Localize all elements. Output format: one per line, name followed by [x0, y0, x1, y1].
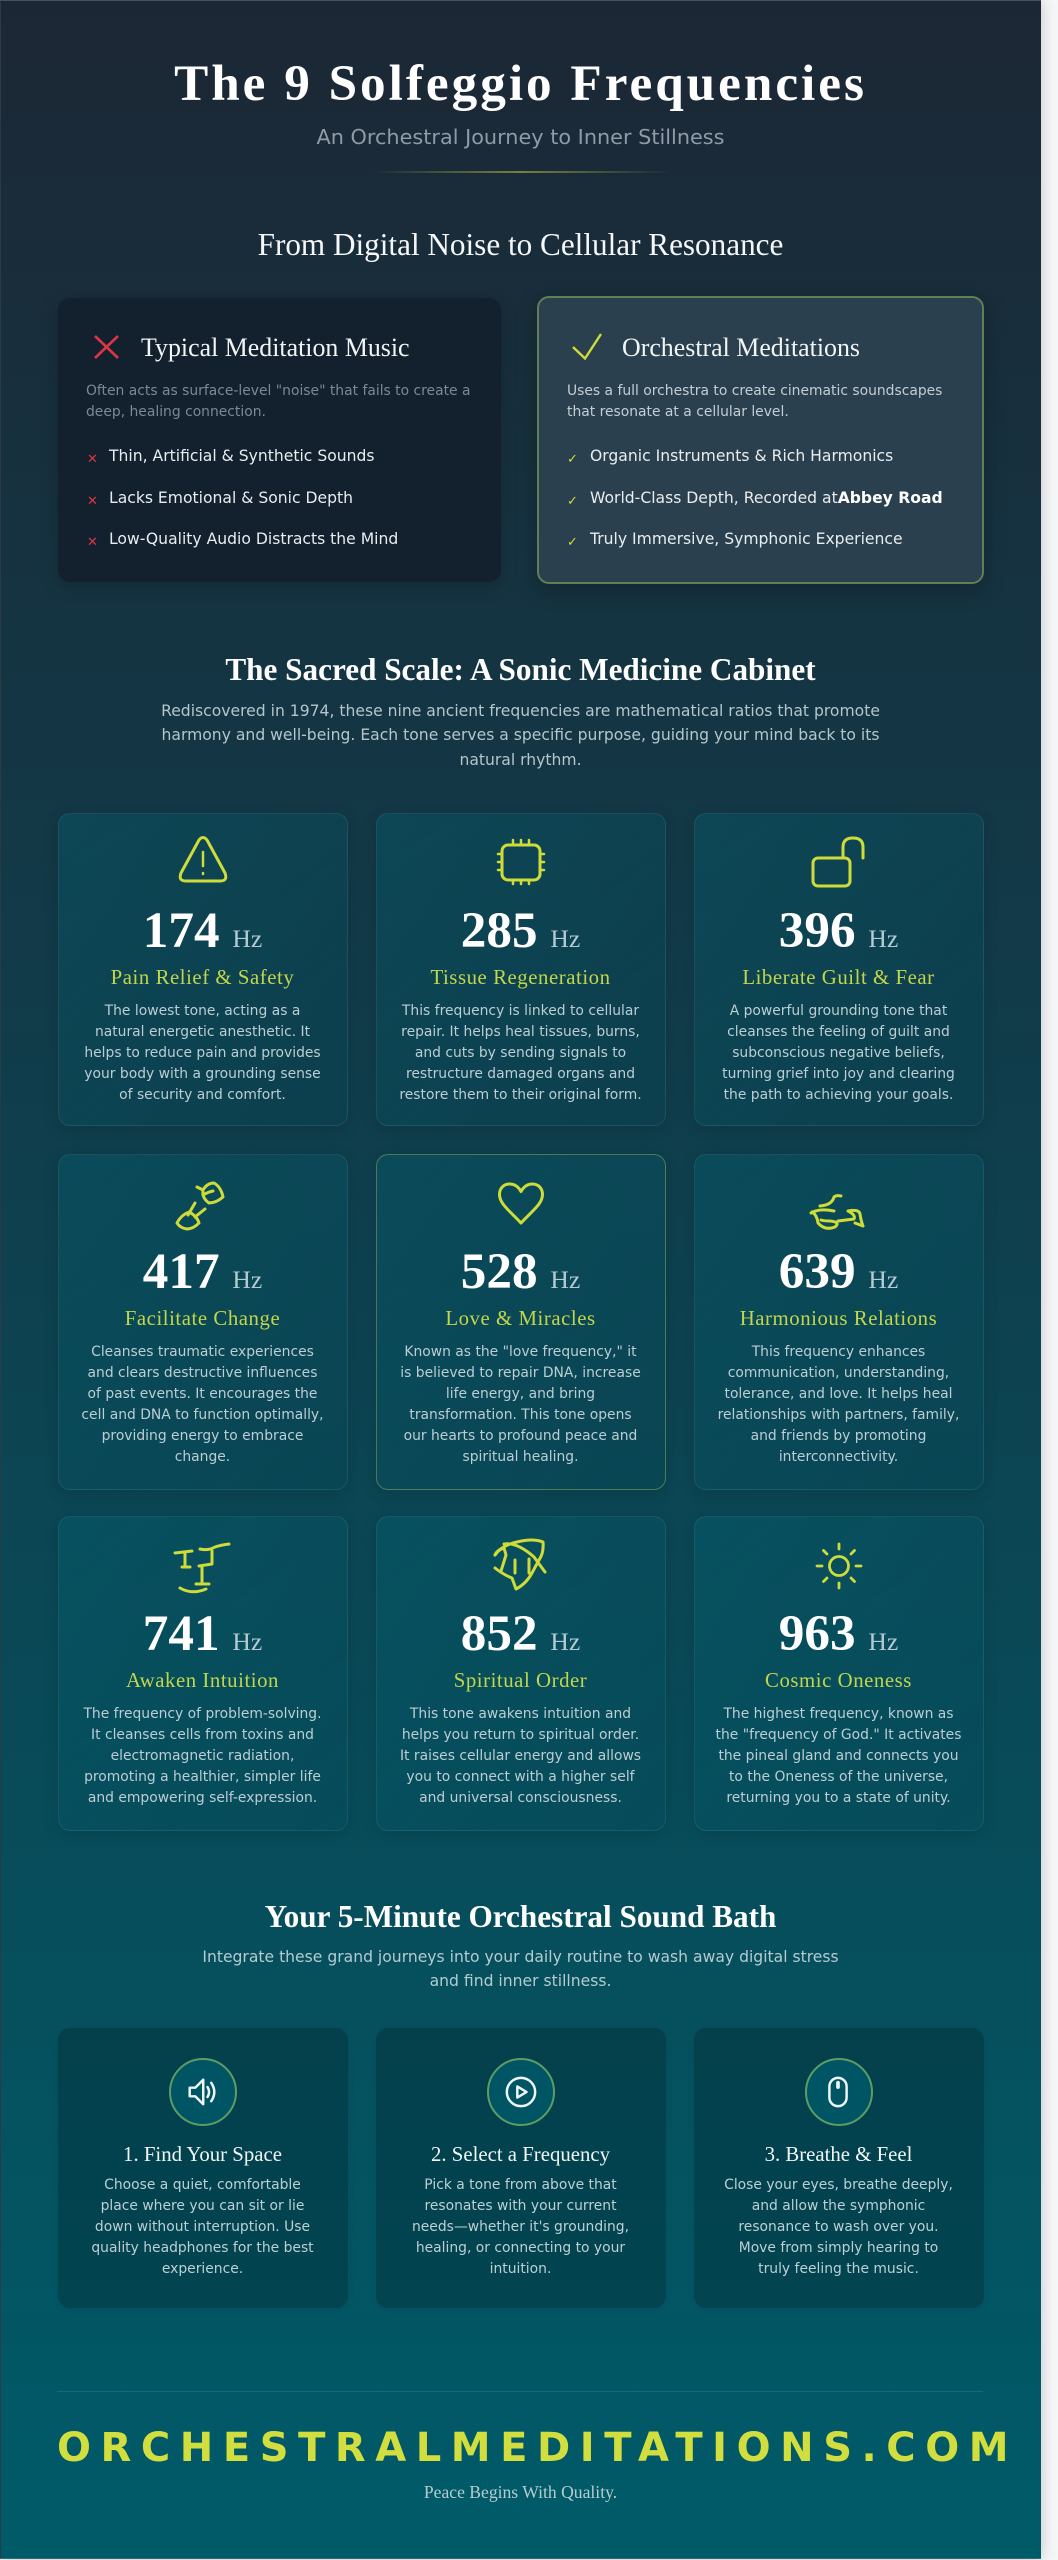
panel: step 1 — [58, 2028, 348, 2308]
frequency description — [400, 1344, 641, 1465]
frequency description: you to connect with a higher self — [406, 1769, 635, 1785]
panel: 639 Hz — [694, 1154, 984, 1490]
frequency description: is believed to repair DNA, increase — [400, 1365, 641, 1381]
step description: Choose a quiet, comfortable — [104, 2177, 301, 2193]
frequency name: Liberate Guilt & Fear — [742, 966, 935, 989]
frequency description: your body with a grounding sense — [84, 1066, 321, 1082]
frequency description: transformation. This tone opens — [409, 1407, 632, 1423]
frequency description: and clears destructive influences — [88, 1365, 317, 1381]
frequency description: the path to achieving your goals. — [724, 1087, 953, 1103]
frequency description: electromagnetic radiation, — [111, 1748, 294, 1764]
step title: 3. Breathe & Feel — [765, 2143, 912, 2166]
icon: broken chain — [176, 1182, 224, 1230]
frequency description: and universal consciousness. — [419, 1790, 622, 1806]
description — [567, 383, 942, 420]
heading: orchestral: Orchestral Meditations — [622, 333, 860, 362]
intro text: sound bath — [202, 1948, 839, 1990]
header divider — [371, 171, 671, 173]
frequency value: 285 Hz — [461, 902, 580, 959]
footer logo: ORCHESTRALMEDITATIONS.COM — [57, 2425, 1018, 2471]
frequency description: interconnectivity. — [779, 1449, 898, 1465]
icon: warning triangle — [178, 836, 228, 882]
frequency description: of security and comfort. — [119, 1087, 286, 1103]
list item: Truly Immersive, Symphonic Experience — [590, 530, 903, 548]
frequency description: It cleanses cells from toxins and — [91, 1727, 314, 1743]
frequency description: The frequency of problem-solving. — [83, 1706, 322, 1722]
step description: down without interruption. Use — [95, 2219, 310, 2235]
frequency value: 639 Hz — [779, 1243, 898, 1300]
icon: connected figures — [809, 1194, 864, 1230]
frequency description: relationships with partners, family, — [718, 1407, 959, 1423]
icon: speaker — [168, 2058, 236, 2126]
step description: healing, or connecting to your — [416, 2240, 625, 2256]
frequency description: and cuts by sending signals to — [415, 1045, 626, 1061]
frequency value: 741 Hz — [143, 1605, 262, 1662]
panel: orchestral meditations — [537, 296, 984, 584]
step description: place where you can sit or lie — [101, 2198, 304, 2214]
icon: yellow check — [572, 334, 602, 360]
frequency value: 852 Hz — [461, 1605, 580, 1662]
step description: and allow the symphonic — [752, 2198, 925, 2214]
frequency description — [718, 1344, 959, 1465]
panel: typical meditation music — [58, 298, 501, 582]
frequency description: This frequency is linked to cellular — [402, 1003, 639, 1019]
list item: Thin, Artificial & Synthetic Sounds — [109, 447, 375, 465]
frequency description: turning grief into joy and clearing — [722, 1066, 955, 1082]
frequency description: This frequency enhances — [752, 1344, 925, 1360]
description: deep, healing connection. — [86, 404, 266, 420]
panel: 852 Hz — [376, 1516, 666, 1831]
frequency description: Known as the "love frequency," it — [404, 1344, 637, 1360]
icon: open lock — [812, 836, 864, 888]
step description: intuition. — [490, 2261, 551, 2277]
frequency description — [722, 1003, 955, 1103]
frequency description — [84, 1003, 321, 1103]
frequency description: It raises cellular energy and allows — [400, 1748, 641, 1764]
list item: Low-Quality Audio Distracts the Mind — [109, 530, 398, 548]
intro text: sacred scale: natural rhythm. — [459, 751, 582, 769]
heading: sacred scale: The Sacred Scale: A Sonic Medicine Cabinet — [225, 652, 816, 687]
frequency description: and friends by promoting — [751, 1428, 926, 1444]
icon: chip — [496, 838, 546, 886]
subtitle: An Orchestral Journey to Inner Stillness — [317, 125, 724, 149]
panel: 963 Hz — [694, 1516, 984, 1831]
list item: ✕ — [87, 494, 98, 509]
frequency description: change. — [175, 1449, 230, 1465]
description: Uses a full orchestra to create cinematic soundscapes — [567, 383, 942, 399]
list item: ✓ — [567, 535, 578, 550]
frequency description: promoting a healthier, simpler life — [84, 1769, 321, 1785]
frequency description: This tone awakens intuition and — [410, 1706, 631, 1722]
step description — [694, 2175, 984, 2280]
description: Often acts as surface-level "noise" that fails to create a — [86, 383, 470, 399]
frequency name: Love & Miracles — [445, 1307, 596, 1330]
frequency description: to the Oneness of the universe, — [729, 1769, 948, 1785]
icon: breath capsule — [804, 2058, 872, 2126]
frequency name: Spiritual Order — [454, 1669, 587, 1692]
frequency description: subconscious negative beliefs, — [732, 1045, 945, 1061]
step description: Close your eyes, breathe deeply, — [724, 2177, 953, 2193]
frequency description — [81, 1344, 324, 1465]
step description: resonance to wash over you. — [738, 2219, 939, 2235]
list item: ✕ — [87, 535, 98, 550]
frequency description: repair. It helps heal tissues, burns, — [401, 1024, 640, 1040]
step description: experience. — [162, 2261, 243, 2277]
heading: sound bath: Your 5-Minute Orchestral Sound Bath — [265, 1899, 776, 1934]
title: The 9 Solfeggio Frequencies — [174, 55, 867, 112]
frequency description: natural energetic anesthetic. It — [95, 1024, 310, 1040]
frequency value: 417 Hz — [143, 1243, 262, 1300]
frequency description: communication, understanding, — [728, 1365, 949, 1381]
frequency description — [716, 1706, 961, 1806]
tagline: Peace Begins With Quality. — [424, 2482, 617, 2502]
panel: 528 Hz (highlighted) — [376, 1154, 666, 1490]
panel: 174 Hz — [58, 813, 348, 1126]
list item: ✕ — [87, 452, 98, 467]
frequency value: 174 Hz — [143, 902, 262, 959]
intro text: sound bath: Integrate these grand journeys into your daily routine to wash away digital stress — [202, 1948, 839, 1966]
heading: typical: Typical Meditation Music — [141, 333, 410, 362]
frequency description: cleanses the feeling of guilt and — [727, 1024, 950, 1040]
step description: Move from simply hearing to — [739, 2240, 938, 2256]
description: that resonate at a cellular level. — [567, 404, 789, 420]
frequency description: spiritual healing. — [462, 1449, 578, 1465]
frequency description: helps you return to spiritual order. — [402, 1727, 639, 1743]
frequency name: Pain Relief & Safety — [111, 966, 294, 989]
frequency description — [399, 1003, 642, 1103]
list item: ✓ — [567, 494, 578, 509]
list item: World-Class Depth, Recorded atAbbey Road — [590, 489, 943, 507]
icon: heart — [498, 1182, 544, 1225]
panel: 417 Hz — [58, 1154, 348, 1490]
frequency name: Facilitate Change — [125, 1307, 280, 1330]
frequency name: Cosmic Oneness — [765, 1669, 912, 1692]
frequency description: helps to reduce pain and provides — [84, 1045, 321, 1061]
panel: step 2 — [376, 2028, 666, 2308]
icon: play button — [486, 2058, 554, 2126]
frequency description: A powerful grounding tone that — [730, 1003, 947, 1019]
heading: comparison: From Digital Noise to Cellular Resonance — [258, 227, 783, 262]
frequency description: The lowest tone, acting as a — [105, 1003, 300, 1019]
frequency description — [83, 1706, 322, 1806]
frequency description: providing energy to embrace — [102, 1428, 303, 1444]
description — [86, 383, 470, 420]
step description — [91, 2177, 314, 2277]
frequency value: 963 Hz — [779, 1605, 898, 1662]
step description — [376, 2175, 666, 2280]
frequency name: Harmonious Relations — [740, 1307, 937, 1330]
frequency description: and empowering self-expression. — [88, 1790, 317, 1806]
frequency value: 396 Hz — [779, 902, 898, 959]
intro text: sacred scale — [161, 702, 880, 769]
panel: 741 Hz — [58, 1516, 348, 1831]
frequency description: Cleanses traumatic experiences — [91, 1344, 314, 1360]
panel: step 3 — [694, 2028, 984, 2308]
icon: abstract brain — [493, 1538, 547, 1590]
frequency description: the pineal gland and connects you — [718, 1748, 959, 1764]
list item: Organic Instruments & Rich Harmonics — [590, 447, 893, 465]
frequency description: the "frequency of God." It activates — [716, 1727, 961, 1743]
step description: needs—whether it's grounding, — [412, 2219, 629, 2235]
intro text: sacred scale: harmony and well-being. Each tone serves a specific purpose, guiding your mind back to its — [162, 726, 879, 744]
frequency description: restructure damaged organs and — [406, 1066, 635, 1082]
step description: quality headphones for the best — [91, 2240, 314, 2256]
frequency description: of past events. It encourages the — [88, 1386, 317, 1402]
frequency name: Awaken Intuition — [126, 1669, 279, 1692]
intro text: sound bath: and find inner stillness. — [430, 1972, 611, 1990]
frequency description: our hearts to profound peace and — [404, 1428, 637, 1444]
frequency name: Tissue Regeneration — [430, 966, 611, 989]
frequency description: cell and DNA to function optimally, — [81, 1407, 324, 1423]
step description: Pick a tone from above that — [424, 2177, 617, 2193]
icon: face — [174, 1542, 230, 1594]
intro text: sacred scale: Rediscovered in 1974, these nine ancient frequencies are mathematical ratios that promote — [161, 702, 880, 720]
step title: 1. Find Your Space — [123, 2143, 282, 2166]
list item: Lacks Emotional & Sonic Depth — [109, 489, 353, 507]
list item: ✓ — [567, 452, 578, 467]
panel: 285 Hz — [376, 813, 666, 1126]
frequency description: life energy, and bring — [446, 1386, 595, 1402]
icon: sun — [816, 1542, 862, 1590]
step description: resonates with your current — [424, 2198, 617, 2214]
frequency description: tolerance, and love. It helps heal — [724, 1386, 952, 1402]
frequency description — [400, 1706, 641, 1806]
frequency description: restore them to their original form. — [399, 1087, 642, 1103]
panel: 396 Hz — [694, 813, 984, 1126]
frequency value: 528 Hz — [461, 1243, 580, 1300]
step title: 2. Select a Frequency — [431, 2143, 610, 2166]
step description: truly feeling the music. — [758, 2261, 919, 2277]
footer divider — [57, 2391, 983, 2392]
icon: red cross — [94, 335, 119, 359]
frequency description: returning you to a state of unity. — [726, 1790, 951, 1806]
frequency description: The highest frequency, known as — [723, 1706, 954, 1722]
